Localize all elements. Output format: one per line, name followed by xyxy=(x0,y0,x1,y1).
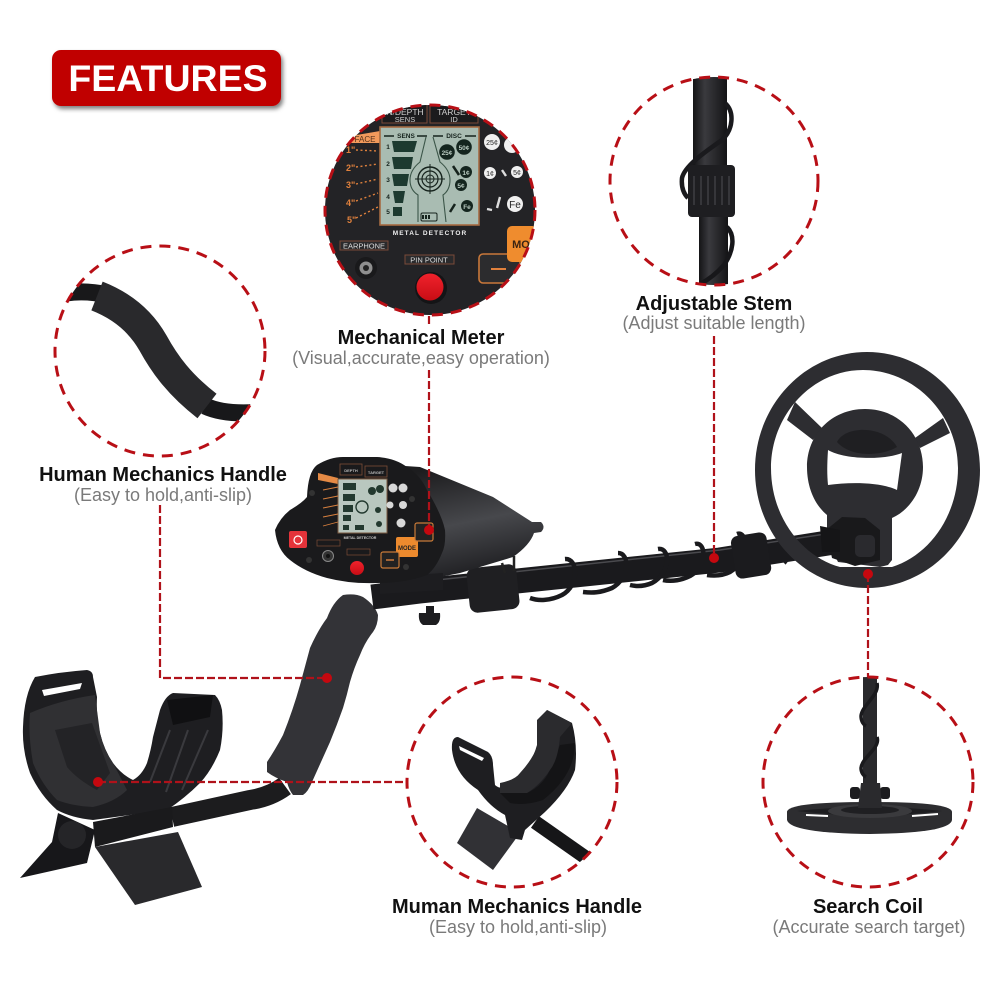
pin point button xyxy=(405,255,454,304)
label: adjustable stem xyxy=(622,293,806,333)
cuff foot and pivot xyxy=(95,832,202,905)
callout circle: adjustable stem xyxy=(610,70,818,290)
foam grip xyxy=(267,594,378,795)
callout circle: cuff detail xyxy=(407,677,617,887)
label: mechanical meter xyxy=(292,327,550,368)
LCD display: 1 xyxy=(386,144,390,151)
callout circle: search coil side view xyxy=(763,670,973,887)
orange depth scale: 3" xyxy=(346,180,355,190)
control housing xyxy=(275,457,544,594)
orange depth scale: 4" xyxy=(346,198,355,208)
orange depth scale: 1" xyxy=(346,145,355,155)
orange depth scale: FACE xyxy=(355,135,375,144)
forearm cuff xyxy=(20,670,223,905)
control housing: DEPTH xyxy=(344,468,358,473)
depth and target tabs: SENS xyxy=(395,115,415,124)
label: muman mechanics handle: (Easy to hold,anti-slip) xyxy=(429,917,607,937)
callout circle: mechanical meter xyxy=(320,100,540,320)
pin point button: PIN POINT xyxy=(410,256,448,264)
label: mechanical meter: (Visual,accurate,easy operation) xyxy=(292,348,550,368)
target symbols on panel: 1¢ xyxy=(486,171,494,178)
label: METAL DETECTOR: METAL DETECTOR xyxy=(393,230,467,237)
arm tube xyxy=(172,786,285,817)
target symbols on panel xyxy=(484,134,523,212)
metal detector product photo xyxy=(20,352,980,905)
title badge: FEATURES xyxy=(52,50,281,106)
label: human mechanics handle: Human Mechanics Handle xyxy=(39,464,287,486)
LCD display: 5¢ xyxy=(457,183,465,190)
label: mechanical meter: Mechanical Meter xyxy=(338,327,505,349)
label: adjustable stem: (Adjust suitable length) xyxy=(622,313,806,333)
LCD display: 2 xyxy=(386,161,390,168)
connector lines xyxy=(98,316,868,782)
mode and minus buttons: MO xyxy=(512,239,530,251)
label: muman mechanics handle xyxy=(392,896,642,937)
label: human mechanics handle: (Easy to hold,anti-slip) xyxy=(74,485,252,505)
search coil xyxy=(755,352,980,588)
label: search coil xyxy=(772,896,966,937)
depth and target tabs: N/DEPTH xyxy=(386,107,424,117)
earphone jack: EARPHONE xyxy=(343,242,385,250)
label: search coil: (Accurate search target) xyxy=(772,917,966,937)
depth and target tabs: TARGET xyxy=(437,107,471,117)
second collar xyxy=(730,531,772,580)
LCD display: 25¢ xyxy=(442,150,453,157)
LCD display: 1¢ xyxy=(462,170,470,177)
orange depth scale: 2" xyxy=(346,163,355,173)
LCD display: Fe xyxy=(463,204,471,211)
connector end dots xyxy=(93,525,873,787)
LCD display: DISC xyxy=(446,133,462,140)
control housing: METAL DETECTOR xyxy=(344,536,377,540)
control housing: TARGET xyxy=(368,470,385,475)
control panel face xyxy=(275,457,445,583)
target symbols on panel: 5¢ xyxy=(513,170,521,177)
label: search coil: Search Coil xyxy=(813,896,923,918)
main shaft xyxy=(372,542,834,597)
callout circle: human mechanics handle grip xyxy=(50,246,265,456)
LCD display: 4 xyxy=(386,194,390,201)
label: muman mechanics handle: Muman Mechanics Handle xyxy=(392,896,642,918)
control housing: MODE xyxy=(398,546,416,552)
LCD display: 50¢ xyxy=(459,145,470,152)
thumb screw under shaft xyxy=(419,606,440,625)
spiral cable xyxy=(530,534,745,600)
earphone jack xyxy=(340,241,388,279)
target symbols on panel: 25¢ xyxy=(486,140,498,147)
orange depth scale xyxy=(345,131,380,225)
LCD display: 3 xyxy=(386,177,390,184)
target symbols on panel: Fe xyxy=(509,200,521,211)
label: adjustable stem: Adjustable Stem xyxy=(636,293,792,315)
mode and minus buttons xyxy=(479,226,537,283)
depth and target tabs xyxy=(382,105,478,124)
orange depth scale: 5" xyxy=(347,215,356,225)
depth and target tabs: ID xyxy=(450,115,458,124)
LCD display: 5 xyxy=(386,209,390,216)
label: human mechanics handle xyxy=(39,464,287,505)
LCD display xyxy=(380,127,479,225)
shaft clamp xyxy=(466,564,520,613)
LCD display: SENS xyxy=(397,133,416,140)
title badge: FEATURES: FEATURES xyxy=(68,57,268,99)
